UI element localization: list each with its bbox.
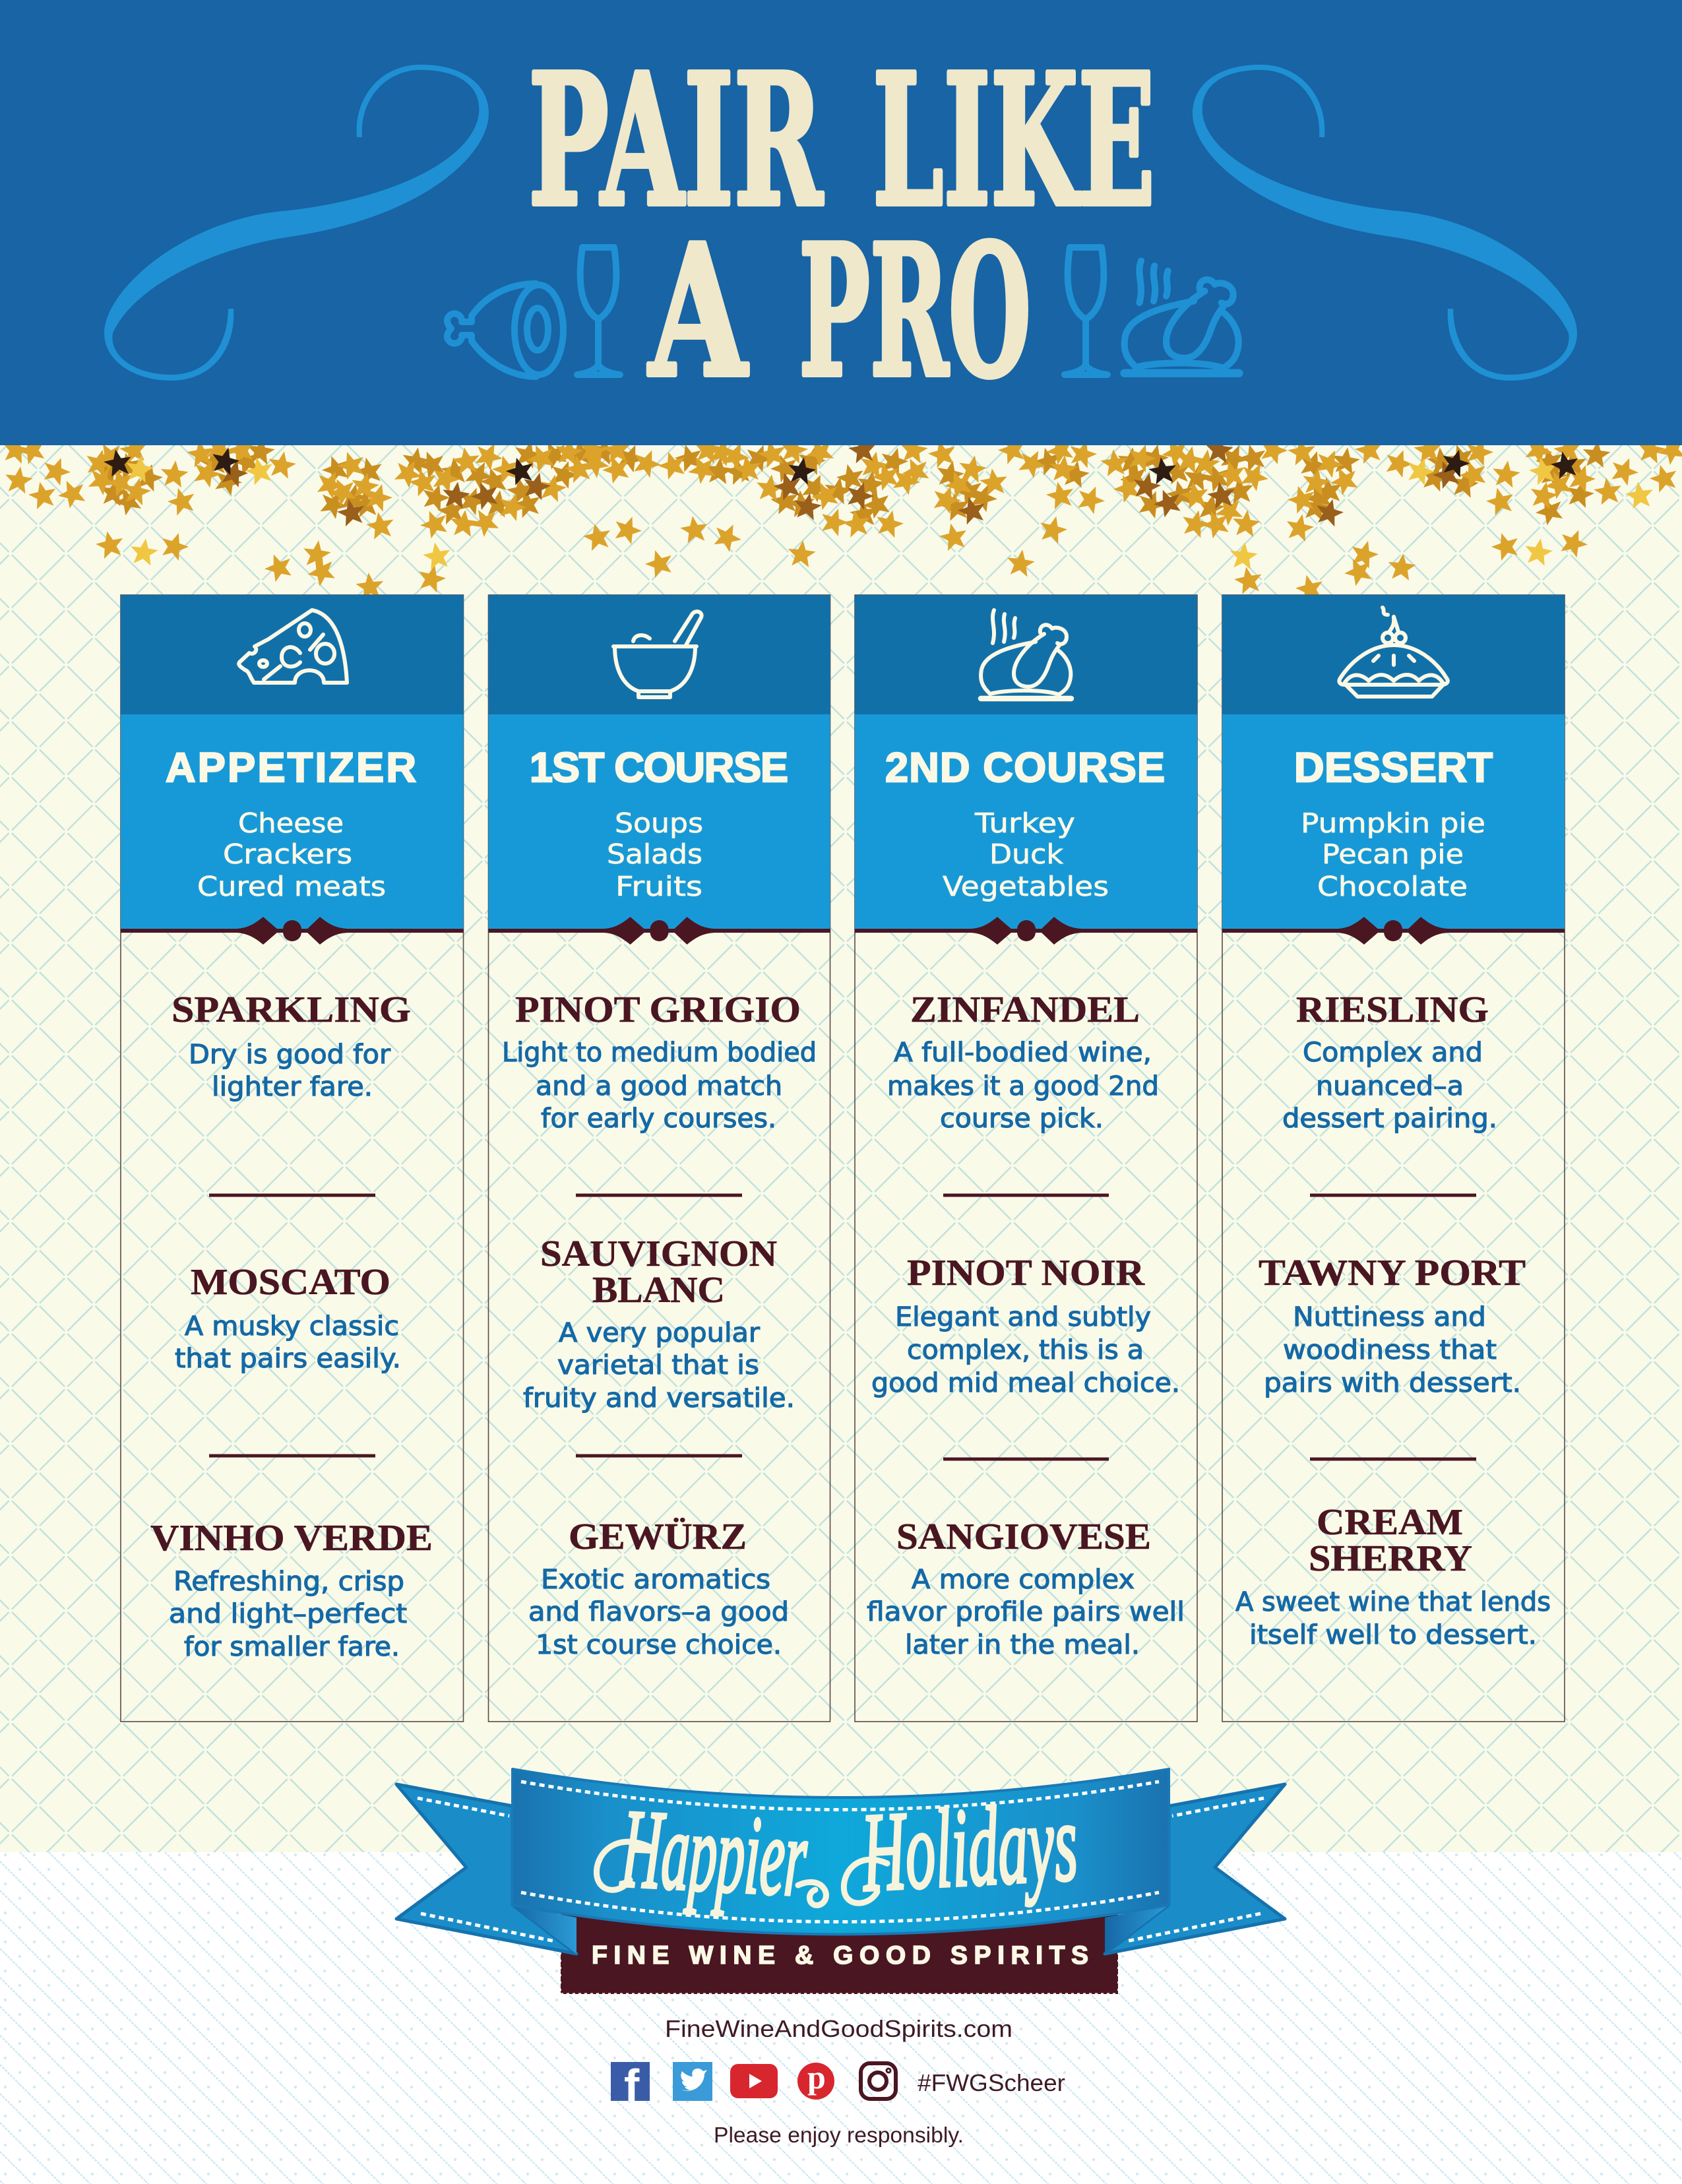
- heading: APPETIZER: [166, 745, 416, 791]
- ornament rule: [488, 917, 830, 945]
- icon: pinterest: p: [807, 2059, 826, 2096]
- light band: [121, 714, 463, 930]
- website: FineWineAndGoodSpirits.com: [665, 2015, 1012, 2042]
- title swash left: [104, 65, 489, 381]
- disclaimer: Please enjoy responsibly.: [714, 2123, 964, 2147]
- icon: pinterest: [797, 2059, 834, 2100]
- wine: pinot noir: [871, 1253, 1180, 1398]
- banner with brand plaque: [396, 1769, 1285, 1994]
- food list: Turkey: [974, 807, 1075, 839]
- heading: 1ST COURSE: [530, 745, 788, 791]
- wine: vinho verde: for smaller fare.: [184, 1632, 400, 1662]
- ornament rule: [121, 917, 463, 945]
- wine: zinfandel: ZINFANDEL: [910, 989, 1140, 1030]
- title: [528, 34, 1155, 418]
- happier holidays script: Holidays: [858, 1780, 1080, 1915]
- wine: pinot noir: Elegant and subtly: [895, 1302, 1151, 1332]
- wine: sangiovese: later in the meal.: [905, 1630, 1140, 1660]
- wine: riesling: dessert pairing.: [1282, 1104, 1497, 1134]
- ribbon centre: [513, 1769, 1169, 1934]
- icon: twitter: [673, 2062, 712, 2101]
- ornament rule: [855, 917, 1197, 945]
- food list: [943, 807, 1109, 902]
- panel header: dark band with bowl icon: [488, 595, 830, 714]
- wine: zinfandel: makes it a good 2nd: [887, 1071, 1159, 1102]
- wine: pinot grigio: [502, 989, 817, 1134]
- wine: vinho verde: and light–perfect: [169, 1599, 407, 1629]
- wine: vinho verde: Refreshing, crisp: [173, 1567, 404, 1597]
- ribbon stitching: [521, 1782, 1159, 1922]
- wine: gewurz: GEWÜRZ: [569, 1516, 747, 1557]
- icon: ham: [447, 284, 563, 377]
- panel: appetizer: [121, 595, 463, 1722]
- wine: moscato: MOSCATO: [191, 1262, 390, 1303]
- wine: tawny port: pairs with dessert.: [1264, 1368, 1521, 1398]
- food list: Cheese: [238, 807, 344, 839]
- food list: Pecan pie: [1322, 838, 1464, 870]
- icon: facebook: [611, 2060, 650, 2111]
- food list: [1301, 807, 1485, 902]
- wine: moscato: [175, 1262, 401, 1374]
- hashtag: #FWGScheer: [918, 2069, 1065, 2096]
- wine: tawny port: [1259, 1253, 1526, 1398]
- title: LIKE: [873, 34, 1155, 247]
- panel header: dark band with cheese icon: [121, 595, 463, 714]
- icon: facebook: f: [624, 2060, 640, 2111]
- light band: [1222, 714, 1565, 930]
- wine: pinot grigio: for early courses.: [541, 1104, 776, 1134]
- wine: sauvignon blanc: varietal that is: [557, 1350, 759, 1381]
- wine: riesling: RIESLING: [1296, 989, 1489, 1030]
- background: white diagonal stripes and dots: [0, 1852, 1682, 2184]
- wine: vinho verde: VINHO VERDE: [150, 1518, 433, 1559]
- food list: Fruits: [615, 871, 702, 902]
- wine: pinot noir: complex, this is a: [907, 1335, 1144, 1365]
- wine: sauvignon blanc: BLANC: [592, 1270, 725, 1311]
- ornament rule: [1222, 917, 1565, 945]
- heading: DESSERT: [1294, 745, 1493, 791]
- gold star confetti: [0, 431, 1682, 604]
- title: A: [647, 205, 749, 418]
- panel header: dark band with turkey icon: [855, 595, 1197, 714]
- title: PAIR: [528, 34, 824, 247]
- wine: sauvignon blanc: fruity and versatile.: [523, 1383, 795, 1414]
- wine: cream sherry: SHERRY: [1309, 1538, 1472, 1579]
- icon: youtube: [730, 2064, 778, 2098]
- food list: Chocolate: [1317, 871, 1468, 902]
- wine: tawny port: woodiness that: [1283, 1335, 1497, 1365]
- food list: Vegetables: [943, 871, 1109, 902]
- wine: sangiovese: A more complex: [912, 1565, 1135, 1595]
- wine: moscato: A musky classic: [185, 1311, 399, 1342]
- light band: [855, 714, 1197, 930]
- title: PRO: [799, 205, 1031, 418]
- panel: dessert: [1222, 595, 1565, 1722]
- panel: 2nd course: [855, 595, 1197, 1722]
- panel header: dark band with pie icon: [1222, 595, 1565, 714]
- wine: cream sherry: [1235, 1502, 1551, 1650]
- wine: sparkling: [171, 989, 411, 1102]
- wine: cream sherry: itself well to dessert.: [1249, 1620, 1537, 1650]
- ribbon tail right: [1105, 1784, 1285, 1954]
- wine: pinot noir: PINOT NOIR: [907, 1253, 1145, 1294]
- wine: sangiovese: SANGIOVESE: [896, 1516, 1151, 1557]
- maroon plaque: [561, 1900, 1118, 1994]
- wine: sangiovese: flavor profile pairs well: [867, 1597, 1185, 1627]
- wine: moscato: that pairs easily.: [175, 1344, 401, 1374]
- wine: sauvignon blanc: SAUVIGNON: [540, 1233, 777, 1274]
- heading: 2ND COURSE: [885, 745, 1165, 791]
- food list: Salads: [607, 838, 702, 870]
- wine: zinfandel: A full-bodied wine,: [894, 1038, 1152, 1068]
- wine: pinot grigio: Light to medium bodied: [502, 1038, 817, 1068]
- food list: Cured meats: [197, 871, 386, 902]
- happier holidays script: Happier: [618, 1786, 810, 1919]
- wine: cream sherry: A sweet wine that lends: [1235, 1587, 1551, 1617]
- header band: [0, 0, 1682, 445]
- panel: 1st course: [488, 595, 830, 1722]
- social icons: [611, 2059, 896, 2111]
- wine: tawny port: Nuttiness and: [1293, 1302, 1486, 1332]
- icon: champagne flute right: [1065, 247, 1107, 375]
- food list: Pumpkin pie: [1301, 807, 1485, 839]
- wine: sparkling: SPARKLING: [171, 989, 411, 1030]
- food list: Soups: [615, 807, 703, 839]
- wine: riesling: [1282, 989, 1497, 1134]
- wine: pinot grigio: and a good match: [536, 1071, 782, 1102]
- ribbon tail left: [396, 1784, 576, 1954]
- food list: Crackers: [223, 838, 352, 870]
- wine: sparkling: Dry is good for: [189, 1040, 391, 1070]
- wine: vinho verde: [150, 1518, 433, 1662]
- icon: roast turkey header: [1125, 261, 1239, 373]
- wine: sangiovese: [867, 1516, 1185, 1660]
- light band: [488, 714, 830, 930]
- wine: cream sherry: CREAM: [1317, 1502, 1463, 1543]
- wine: pinot noir: good mid meal choice.: [871, 1368, 1180, 1398]
- title swash right: [1193, 65, 1577, 381]
- icon: champagne flute left: [577, 247, 620, 375]
- wine: tawny port: TAWNY PORT: [1259, 1253, 1526, 1294]
- food list: [607, 807, 703, 902]
- wine: riesling: Complex and: [1303, 1038, 1483, 1068]
- wine: sauvignon blanc: [523, 1233, 795, 1414]
- wine: zinfandel: [887, 989, 1159, 1134]
- wine: sparkling: lighter fare.: [212, 1072, 373, 1102]
- icon: instagram: [861, 2063, 896, 2099]
- food list: [197, 807, 386, 902]
- wine: riesling: nuanced–a: [1316, 1071, 1464, 1102]
- wine: gewurz: and flavors–a good: [528, 1597, 789, 1627]
- food list: Duck: [989, 838, 1063, 870]
- brand name: FINE WINE & GOOD SPIRITS: [592, 1941, 1088, 1970]
- wine: gewurz: [528, 1516, 789, 1660]
- wine: sauvignon blanc: A very popular: [559, 1318, 761, 1348]
- wine: gewurz: Exotic aromatics: [541, 1565, 770, 1595]
- wine: pinot grigio: PINOT GRIGIO: [515, 989, 801, 1030]
- wine: gewurz: 1st course choice.: [536, 1630, 782, 1660]
- wine: zinfandel: course pick.: [940, 1104, 1104, 1134]
